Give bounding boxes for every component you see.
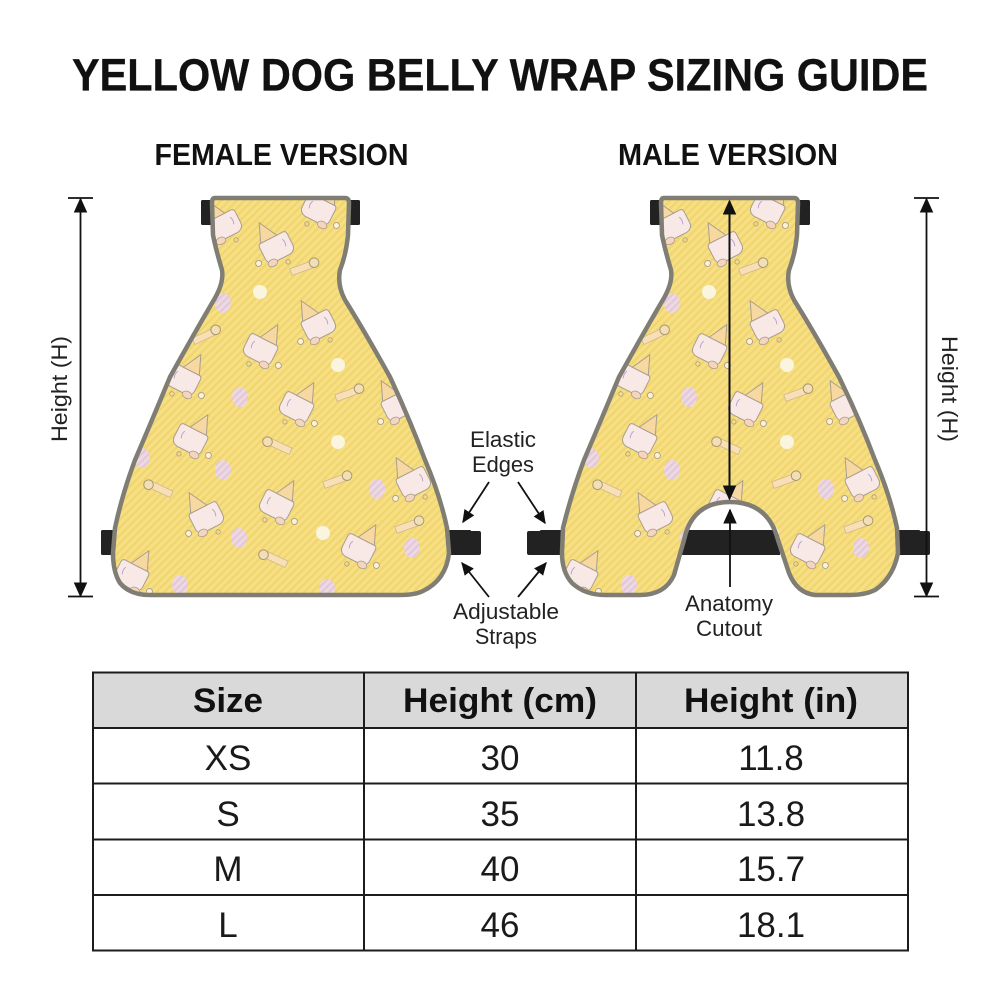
garment: male fabric [564,200,896,593]
row: L [218,906,805,945]
row: M: 15.7 [737,850,805,889]
garment: male edge [562,198,898,595]
callout: anatomy cutout [685,510,773,641]
row: XS [205,739,804,778]
table header: Size [193,682,263,720]
callout: adjustable straps [453,563,559,649]
table header [92,672,908,728]
straps: male [527,200,930,555]
row: L: 18.1 [737,906,805,945]
row: M: 40 [481,850,519,889]
row: XS: 11.8 [738,739,804,778]
dimension: female height arrow [68,198,93,596]
garment: female fabric [115,200,447,593]
table header: Height (in) [684,682,858,720]
callout: adjustable straps: Adjustable [453,599,559,624]
row: M [213,850,805,889]
sizing table [92,672,908,951]
cutout opening [687,505,775,530]
heading: male version: MALE VERSION [618,138,838,172]
row: XS: 30 [481,739,519,778]
row: S: 13.8 [737,795,805,834]
dimension: male outer height arrow [914,198,939,596]
callout: adjustable straps: Straps [475,624,537,649]
callout: elastic edges [463,427,545,523]
row: S [216,795,805,834]
callout: anatomy cutout: Cutout [696,616,762,641]
row: XS: XS [205,739,251,778]
diagram: male wrap [527,196,930,598]
table header: Height (cm) [403,682,597,720]
label: male height: Height (H) [937,336,962,442]
garment: female edge [113,198,449,595]
callout: elastic edges: Elastic [470,427,536,452]
diagram: female wrap [101,196,481,598]
dimension: male internal height arrow [728,201,730,499]
row: L: 46 [481,906,519,945]
table grid [93,672,908,951]
row: S: 35 [481,795,519,834]
callout: anatomy cutout: Anatomy [685,591,773,616]
heading: female version: FEMALE VERSION [154,138,408,172]
callout: elastic edges: Edges [472,452,534,477]
row: S: S [216,795,240,834]
label: female height: Height (H) [47,336,72,442]
row: M: M [213,850,243,889]
straps: female [101,200,481,555]
title: YELLOW DOG BELLY WRAP SIZING GUIDE [72,50,928,100]
row: L: L [218,906,238,945]
